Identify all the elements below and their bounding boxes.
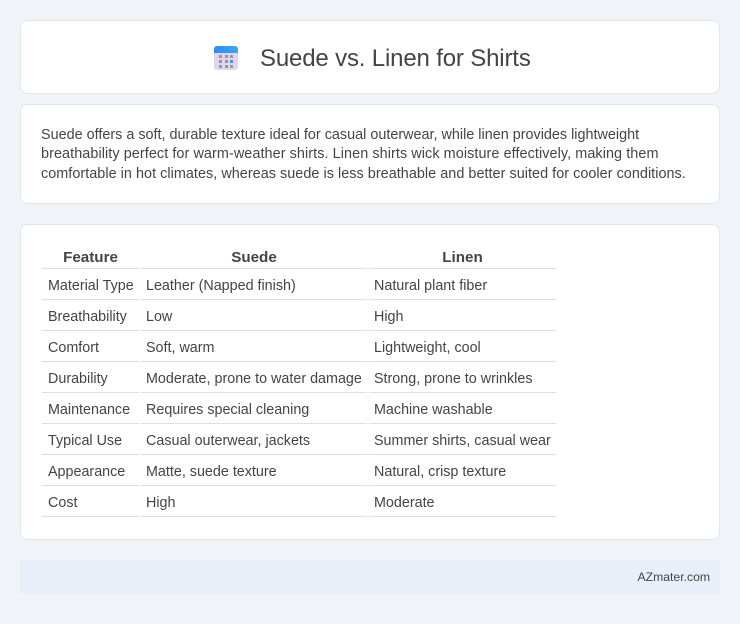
row: Maintenance: Requires special cleaning <box>146 402 309 418</box>
row: Material Type: Material Type <box>48 278 134 294</box>
row: Breathability <box>42 309 556 331</box>
row: Maintenance <box>42 402 556 424</box>
row: Appearance: Matte, suede texture <box>146 464 277 480</box>
row: Comfort: Soft, warm <box>146 340 214 356</box>
row: Comfort: Comfort <box>48 340 99 356</box>
row: Durability <box>42 371 556 393</box>
icon: calendar <box>214 46 238 70</box>
row: Breathability: Low <box>146 309 172 325</box>
row: Breathability: Breathability <box>48 309 127 325</box>
table header row <box>63 249 483 266</box>
row: Durability: Durability <box>48 371 108 387</box>
text block: description: breathability perfect for warm-weather shirts. Linen shirts wick moisture effectively, making them <box>41 146 659 162</box>
title: Suede vs. Linen for Shirts <box>260 45 531 72</box>
row: Durability: Moderate, prone to water damage <box>146 371 362 387</box>
table header row: Feature <box>63 249 118 266</box>
row: Material Type: Leather (Napped finish) <box>146 278 296 294</box>
row: Maintenance: Machine washable <box>374 402 493 418</box>
row: Breathability: High <box>374 309 403 325</box>
row: Maintenance: Maintenance <box>48 402 130 418</box>
row: Comfort: Lightweight, cool <box>374 340 481 356</box>
row: Cost: Cost <box>48 495 77 511</box>
row: Cost: Moderate <box>374 495 435 511</box>
row: Material Type <box>42 278 556 300</box>
row: Typical Use <box>42 433 556 455</box>
row: Material Type: Natural plant fiber <box>374 278 487 294</box>
footer bar <box>20 560 720 594</box>
row: Cost <box>42 495 556 517</box>
row: Typical Use: Casual outerwear, jackets <box>146 433 310 449</box>
panel: comparison table <box>20 224 720 540</box>
footer text: AZmater.com: AZmater.com <box>638 570 710 584</box>
row: Appearance <box>42 464 556 486</box>
row: Comfort <box>42 340 556 362</box>
row: Typical Use: Summer shirts, casual wear <box>374 433 551 449</box>
row: Typical Use: Typical Use <box>48 433 122 449</box>
row: Durability: Strong, prone to wrinkles <box>374 371 532 387</box>
row: Appearance: Natural, crisp texture <box>374 464 506 480</box>
text block: description: Suede offers a soft, durable texture ideal for casual outerwear, while linen provides lightweight <box>41 127 639 143</box>
table header row: Linen <box>442 249 483 266</box>
panel: description <box>20 104 720 204</box>
row: Cost: High <box>146 495 175 511</box>
panel: title header <box>20 20 720 94</box>
text block: description <box>41 127 686 182</box>
text block: description: comfortable in hot climates, whereas suede is less breathable and better suited for cooler conditions. <box>41 166 686 182</box>
table header row: Suede <box>231 249 277 266</box>
row: Appearance: Appearance <box>48 464 125 480</box>
